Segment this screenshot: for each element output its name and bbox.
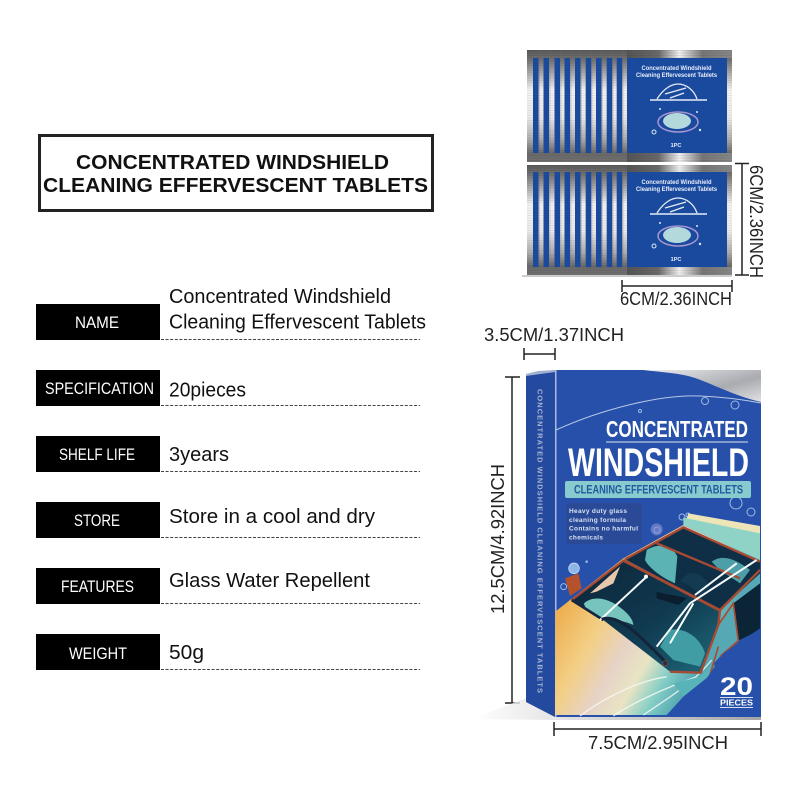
- side window: [733, 583, 760, 641]
- 20 pieces badge: PIECES: [720, 698, 753, 708]
- spec row: name: NAME: [75, 314, 119, 332]
- spec row: store: [36, 502, 420, 538]
- spec row: name: Cleaning Effervescent Tablets: [169, 310, 426, 334]
- 20 pieces badge: 20: [720, 673, 753, 701]
- windshield frame: [572, 561, 720, 673]
- floor shadow: [472, 698, 761, 720]
- product: upper row of tablet sachets: Cleaning Effervescent Tablets: [636, 73, 718, 79]
- spec row: weight: 50g: [169, 641, 204, 664]
- spec row: features: FEATURES: [61, 578, 134, 596]
- box benefits text: chemicals: [569, 534, 603, 542]
- box benefits text: Contains no harmful: [569, 526, 638, 532]
- product: upper row of tablet sachets: 1PC: [671, 143, 681, 149]
- box side panel: [526, 370, 555, 717]
- box benefits text: [566, 503, 642, 544]
- roof glass: [625, 527, 760, 610]
- glass shine streaks: [600, 560, 757, 647]
- spec row: specification: SPECIFICATION: [45, 380, 154, 398]
- box benefits text: Heavy duty glass: [569, 508, 627, 515]
- silver corner swoosh: [643, 370, 761, 402]
- spec row: shelf life: 3years: [169, 443, 229, 466]
- windshield: [572, 561, 720, 673]
- hood highlight stripes: [580, 660, 712, 716]
- rear glass band: [683, 517, 760, 560]
- box side panel: CONCENTRATED WINDSHIELD CLEANING EFFERVESCENT TABLETS: [536, 389, 544, 693]
- product: lower row of tablet sachets: [522, 165, 732, 277]
- dimension: sachet height: [735, 164, 766, 278]
- car hood: [555, 525, 760, 715]
- teal banner: [565, 481, 751, 498]
- 20 pieces badge: [720, 673, 753, 708]
- dimension: box height: [488, 377, 520, 703]
- box benefits text: cleaning formula: [569, 517, 626, 524]
- soap bubble cluster: [561, 523, 663, 596]
- spec row: shelf life: SHELF LIFE: [59, 446, 135, 464]
- box front panel: [555, 370, 761, 717]
- decorative bubbles: [638, 398, 755, 533]
- dimension: sachet height: 6CM/2.36INCH: [746, 165, 766, 278]
- product: lower row of tablet sachets: Cleaning Effervescent Tablets: [636, 187, 718, 193]
- spec row: specification: 20pieces: [169, 378, 246, 402]
- car illustration: [555, 513, 760, 717]
- spec row: store: Store in a cool and dry: [169, 505, 376, 528]
- product: upper row of tablet sachets: [527, 50, 732, 162]
- dimension: box depth: 3.5CM/1.37INCH: [484, 325, 624, 345]
- title box: CLEANING EFFERVESCENT TABLETS: [43, 174, 428, 197]
- product box: [472, 370, 761, 720]
- product: lower row of tablet sachets: Concentrated Windshield: [642, 180, 712, 186]
- spec row: weight: WEIGHT: [69, 645, 127, 663]
- dimension: sachet width: 6CM/2.36INCH: [620, 289, 732, 309]
- dimension: sachet width: [620, 280, 732, 309]
- spec row: name: Concentrated Windshield: [169, 285, 391, 308]
- dimension: box width: 7.5CM/2.95INCH: [588, 733, 728, 753]
- lower right blue corner: [667, 628, 760, 717]
- dimension: box depth: [484, 325, 624, 360]
- wiper: [602, 618, 667, 663]
- spec row: shelf life: [36, 436, 420, 472]
- teal banner: CLEANING EFFERVESCENT TABLETS: [574, 482, 743, 496]
- box heading: CONCENTRATED: CONCENTRATED: [606, 416, 748, 442]
- title box: [40, 136, 432, 210]
- spec row: features: [36, 568, 420, 604]
- spec row: store: STORE: [74, 512, 120, 530]
- spec row: name: [36, 285, 426, 340]
- roof frame bars: [623, 527, 760, 610]
- title box: CONCENTRATED WINDSHIELD: [76, 151, 389, 174]
- spec row: weight: [36, 634, 420, 670]
- spec row: specification: [36, 370, 420, 406]
- product: upper row of tablet sachets: Concentrated Windshield: [642, 66, 712, 72]
- dimension: box height: 12.5CM/4.92INCH: [488, 464, 508, 614]
- dimension: box width: [554, 722, 761, 753]
- spec row: features: Glass Water Repellent: [169, 569, 370, 592]
- product: lower row of tablet sachets: 1PC: [671, 257, 681, 263]
